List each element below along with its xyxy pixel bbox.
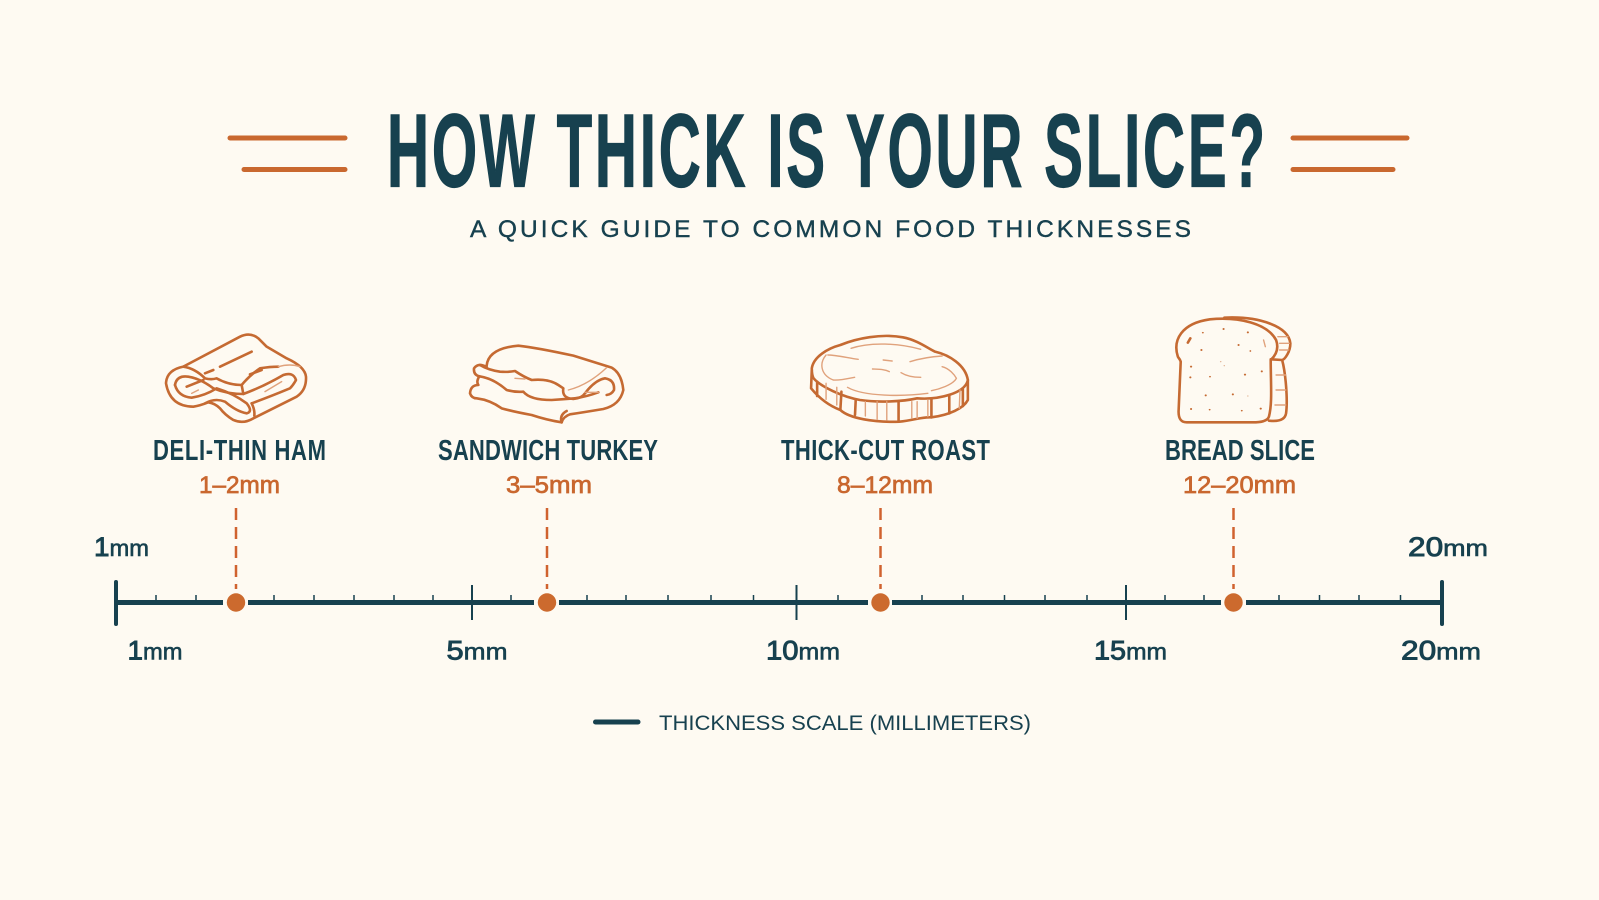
- tick label: 1mm: 1mm: [128, 636, 182, 666]
- range: 8–12mm: 8–12mm: [837, 472, 933, 499]
- legend: THICKNESS SCALE (MILLIMETERS): [659, 712, 1031, 735]
- axis end label: top 20mm: 20mm: [1408, 532, 1488, 562]
- tick label: 5mm: 5mm: [446, 636, 508, 666]
- label: deli-thin ham: DELI-THIN HAM: [153, 435, 326, 467]
- icon: bread slice: [1176, 317, 1290, 422]
- marker: thick-cut roast: [871, 508, 890, 612]
- label: sandwich turkey: SANDWICH TURKEY: [438, 435, 658, 467]
- title accent lines: left: [230, 138, 345, 170]
- label: thick-cut roast: THICK-CUT ROAST: [781, 435, 990, 467]
- subtitle: A QUICK GUIDE TO COMMON FOOD THICKNESSES: [470, 216, 1191, 243]
- label: bread slice: BREAD SLICE: [1165, 435, 1315, 467]
- tick label: 20mm: 20mm: [1401, 636, 1481, 666]
- range: 1–2mm: 1–2mm: [199, 472, 280, 499]
- icon: sandwich turkey: [470, 346, 623, 422]
- marker: deli-thin ham: [227, 508, 245, 612]
- marker: sandwich turkey: [538, 508, 556, 612]
- marker: bread slice: [1224, 508, 1243, 612]
- icon: deli-thin ham: [166, 335, 306, 422]
- axis end label: top 1mm: 1mm: [94, 532, 149, 562]
- thickness scale axis: [116, 582, 1443, 624]
- tick label: 10mm: 10mm: [766, 636, 840, 666]
- title: HOW THICK IS YOUR SLICE?: [387, 93, 1265, 209]
- range: 12–20mm: 12–20mm: [1183, 472, 1296, 499]
- range: 3–5mm: 3–5mm: [506, 472, 592, 499]
- tick label: 15mm: 15mm: [1094, 636, 1167, 666]
- icon: thick-cut roast: [811, 336, 968, 422]
- title accent lines: right: [1293, 138, 1407, 170]
